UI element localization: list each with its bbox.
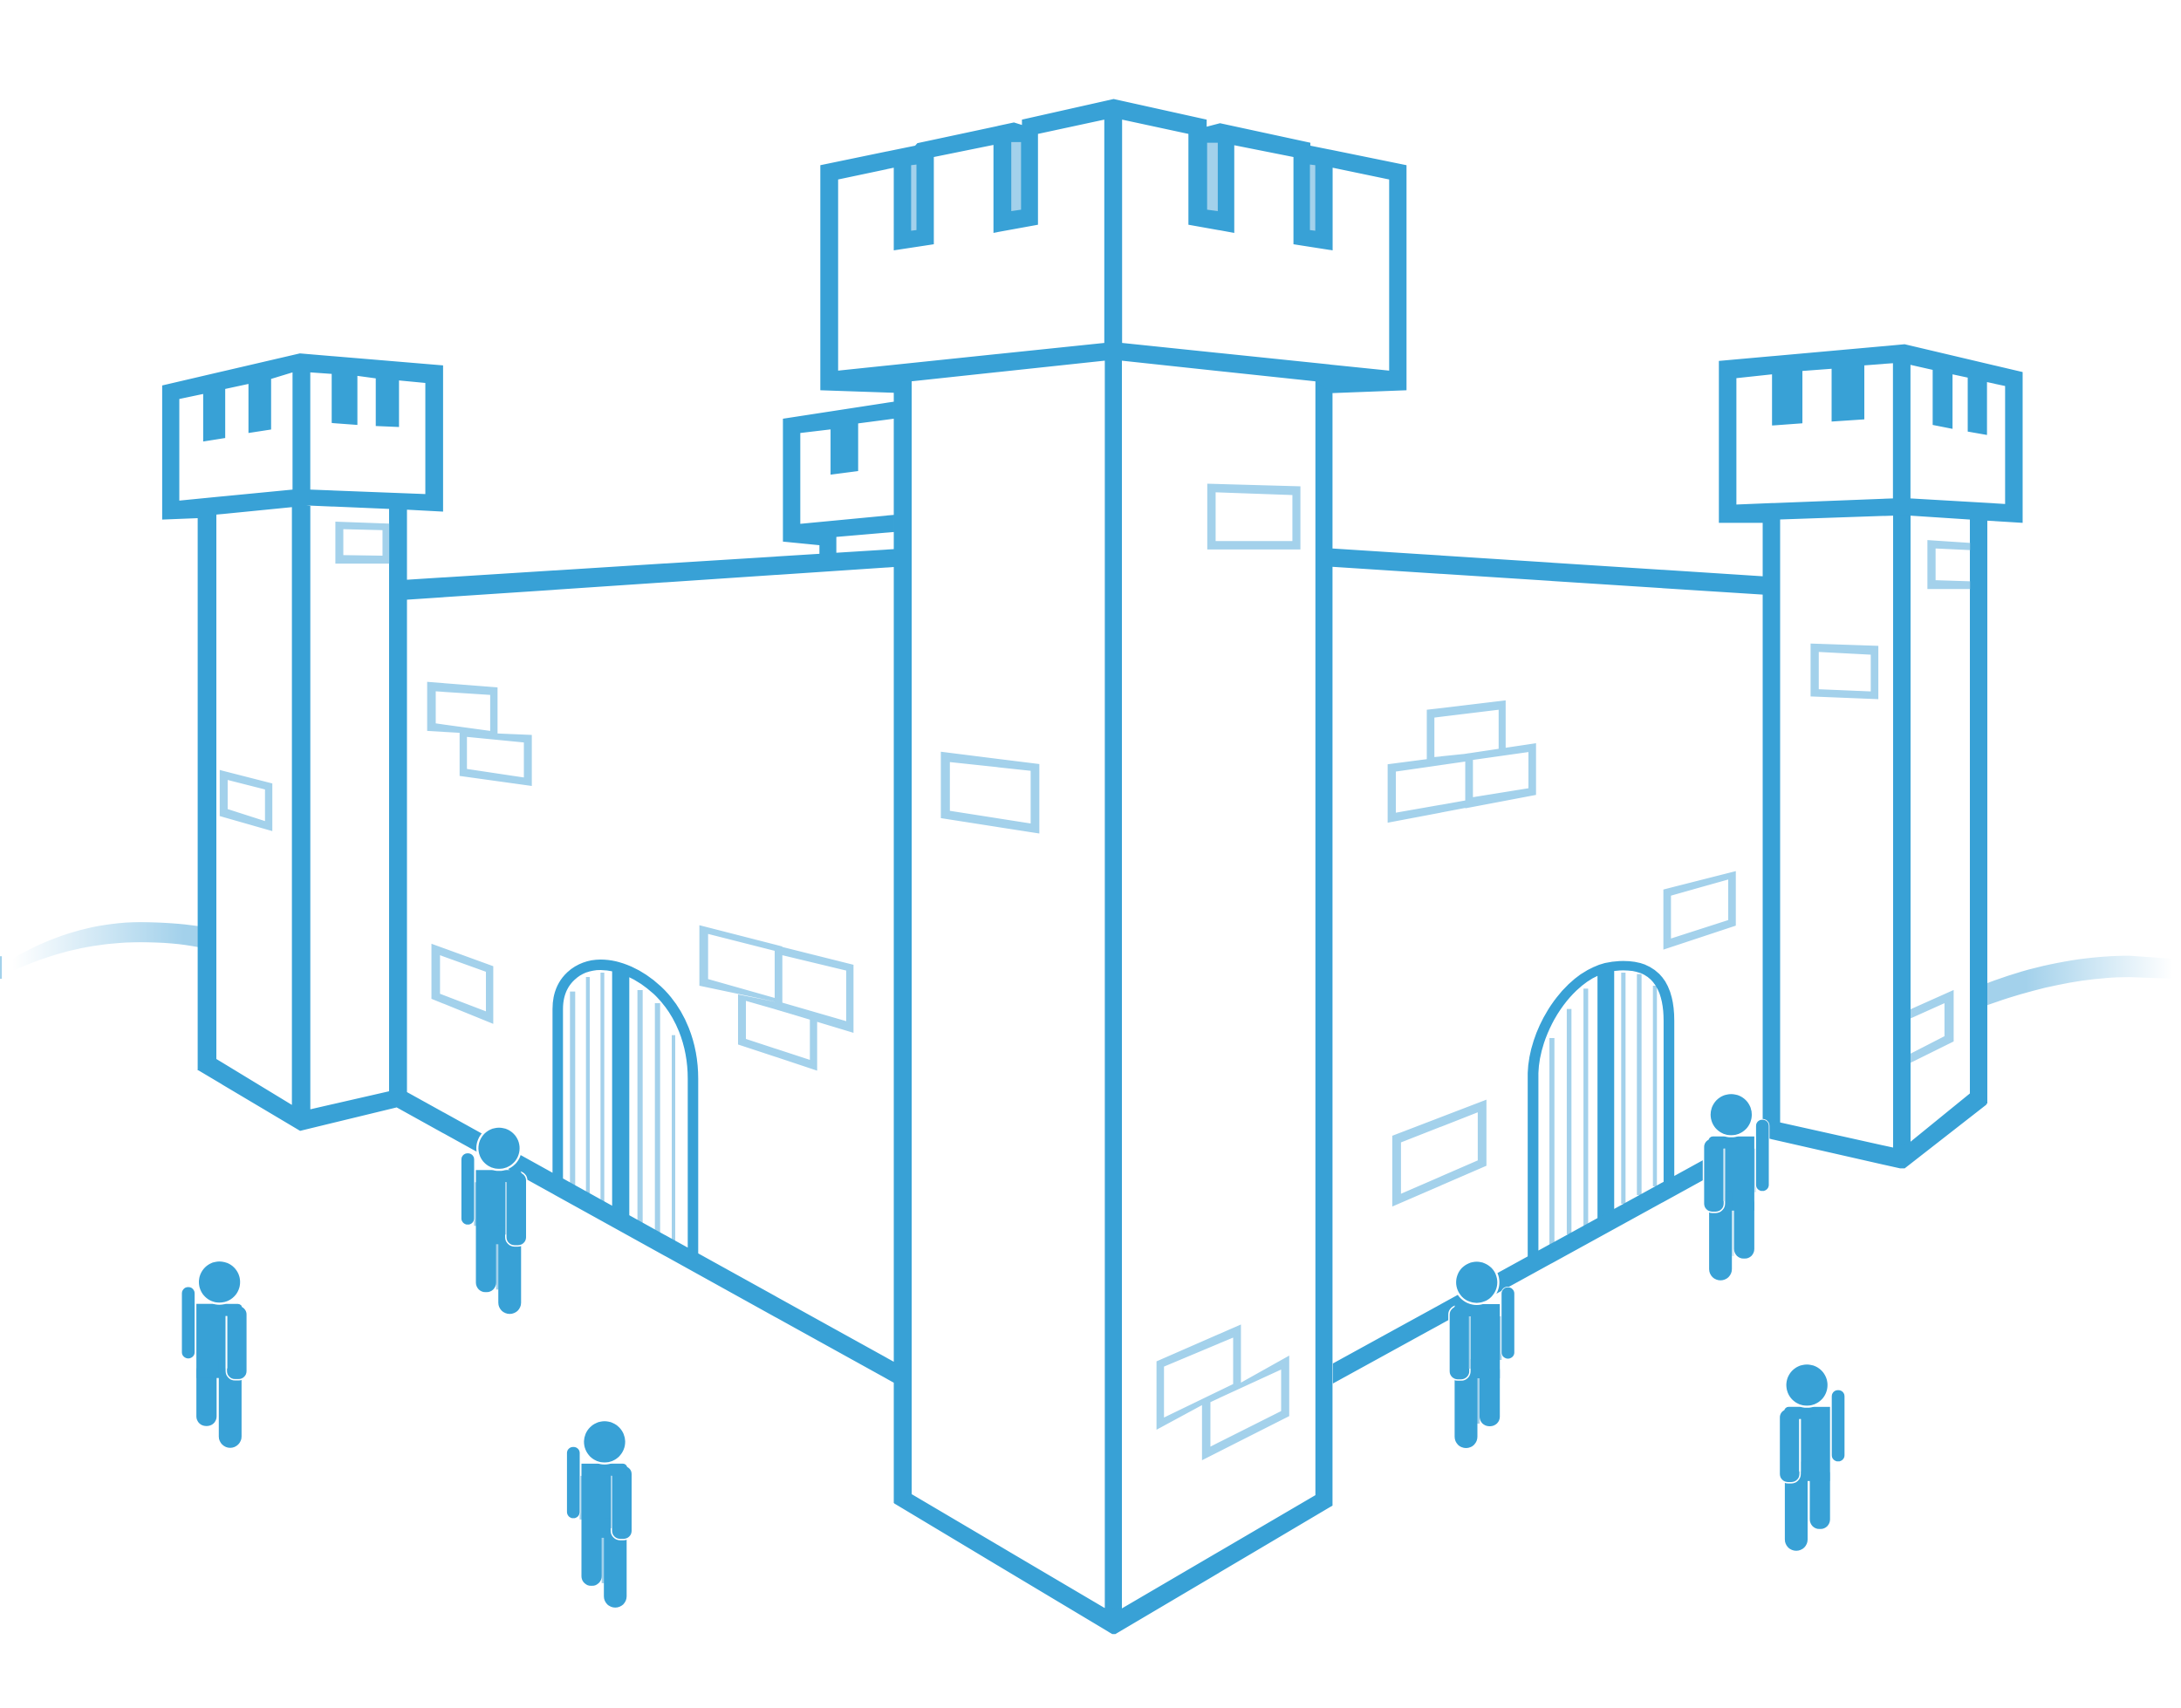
- right tower shaft: [1762, 515, 1987, 1158]
- left wall bricks upper: [427, 682, 532, 1024]
- right wall bricks upper: [1388, 700, 1736, 950]
- left tower parapet: [162, 353, 443, 520]
- right wall brick lower: [1392, 1100, 1487, 1206]
- central tower walls: [893, 349, 1332, 1623]
- back tower behind central tower: [783, 401, 893, 556]
- right curtain wall: [1332, 549, 1762, 1383]
- ground curve: left: [0, 922, 199, 979]
- right door: [1533, 966, 1669, 1258]
- person 3: bottom centre left: [567, 1419, 632, 1608]
- bricks beside door: [700, 926, 853, 1070]
- left tower shaft: [198, 506, 407, 1131]
- left door: [557, 965, 693, 1258]
- person 6: bottom right: [1779, 1363, 1845, 1551]
- right tower base: [1763, 1093, 1987, 1168]
- central tower parapet: [820, 99, 1406, 393]
- central tower: [820, 99, 1406, 1634]
- right tower window lower: [1911, 990, 1953, 1062]
- central tower windows upper: [940, 483, 1301, 834]
- left wall top band: [407, 550, 893, 600]
- person 1: by left wall: [461, 1125, 527, 1314]
- left wall bricks and door: [557, 926, 853, 1258]
- right corner tower: [1719, 345, 2022, 1168]
- person 2: bottom left: [181, 1260, 247, 1448]
- central tower base: [894, 1494, 1332, 1634]
- left tower windows: [220, 522, 389, 831]
- right wall top band: [1332, 549, 1762, 595]
- crenel slits: [911, 142, 1316, 231]
- person 5: by right tower: [1704, 1092, 1769, 1281]
- right tower windows upper: [1810, 540, 1970, 700]
- right wall bottom band: [1333, 1160, 1703, 1383]
- ground curve: right: [1987, 956, 2172, 1005]
- left curtain wall: [397, 550, 897, 1384]
- left corner tower: [162, 353, 443, 1131]
- person 4: by right wall: [1449, 1260, 1514, 1448]
- left wall bottom band: [397, 1090, 897, 1384]
- right tower parapet: [1719, 345, 2022, 523]
- central tower bricks lower: [1157, 1324, 1289, 1460]
